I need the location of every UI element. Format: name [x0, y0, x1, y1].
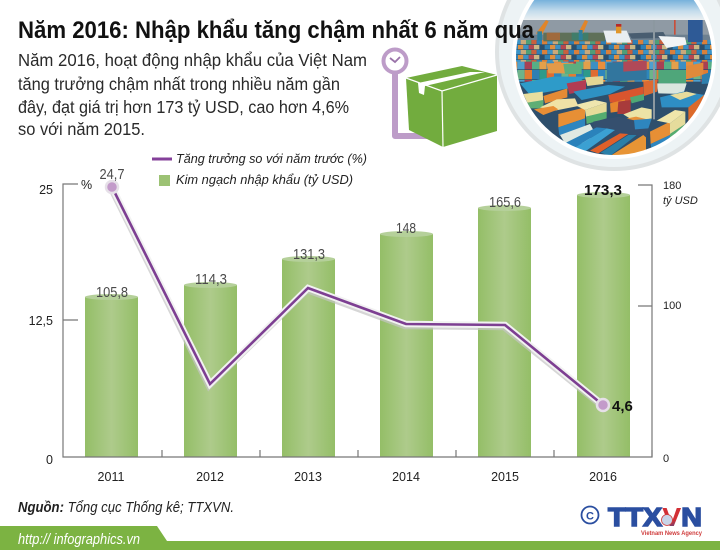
source note: Nguồn: Tổng cục Thống kê; TTXVN. — [18, 500, 234, 516]
axis labels: right: 100 — [663, 300, 681, 312]
foreground stacks — [540, 98, 578, 111]
photo medallion: container port — [495, 0, 720, 171]
intro text block: Năm 2016, hoạt động nhập khẩu của Việt Nam — [18, 50, 367, 70]
icon: box on a scale — [384, 50, 497, 147]
axis labels: right: tỷ USD — [663, 195, 698, 207]
axis labels: left: 25 — [39, 183, 53, 197]
bar value labels: 114,3 — [195, 272, 227, 288]
axis labels: left: % — [81, 178, 92, 192]
bar value labels: 165,6 — [489, 195, 521, 211]
axis labels: years: 2011 — [98, 470, 124, 484]
legend — [152, 152, 367, 187]
axis labels: left: 0 — [46, 453, 53, 467]
axes — [63, 184, 652, 457]
bar chart: import value — [85, 192, 630, 457]
line chart: growth rate — [106, 181, 609, 411]
line value labels: 4,6 — [612, 398, 633, 415]
logo: TTXVN — [582, 502, 702, 537]
axis labels: right: 0 — [663, 453, 669, 465]
mid rows — [520, 77, 587, 95]
bar value labels: 105,8 — [96, 285, 128, 301]
bar value labels — [96, 183, 622, 301]
intro text block: so với năm 2015. — [18, 119, 145, 139]
axis labels: years — [98, 470, 617, 484]
legend: Tăng trưởng so với năm trước (%) — [176, 152, 367, 166]
axis labels: years: 2014 — [392, 470, 420, 484]
logo: TTXVN: C — [586, 510, 594, 522]
bar value labels: 173,3 — [584, 183, 622, 199]
axis labels: left — [29, 178, 92, 467]
line value labels — [100, 167, 633, 415]
axis labels: years: 2013 — [294, 470, 322, 484]
axis labels: left: 12,5 — [29, 314, 53, 328]
far right yard blocks — [658, 70, 686, 83]
line value labels: 24,7 — [100, 167, 124, 183]
intro text block — [18, 50, 367, 139]
footer band — [0, 526, 720, 550]
legend: Kim ngạch nhập khẩu (tỷ USD) — [176, 173, 353, 187]
bar value labels: 148 — [396, 221, 416, 237]
axis labels: years: 2016 — [589, 470, 617, 484]
title: Năm 2016: Nhập khẩu tăng chậm nhất 6 năm qua — [18, 17, 535, 44]
axis labels: right: 180 — [663, 180, 681, 192]
footer band: http:// infographics.vn — [18, 532, 140, 548]
logo: TTXVN: TTXVN — [608, 502, 702, 532]
bar value labels: 131,3 — [293, 247, 325, 263]
intro text block: tăng trưởng chậm nhất trong nhiều năm gần — [18, 74, 340, 94]
axis labels: years: 2012 — [196, 470, 224, 484]
axis labels: years: 2015 — [491, 470, 519, 484]
logo: TTXVN: Vietnam News Agency — [641, 530, 702, 537]
axis labels: right — [663, 180, 698, 465]
background ships and cranes — [543, 33, 605, 41]
intro text block: đây, đạt giá trị hơn 173 tỷ USD, cao hơn 4,6% — [18, 97, 349, 117]
